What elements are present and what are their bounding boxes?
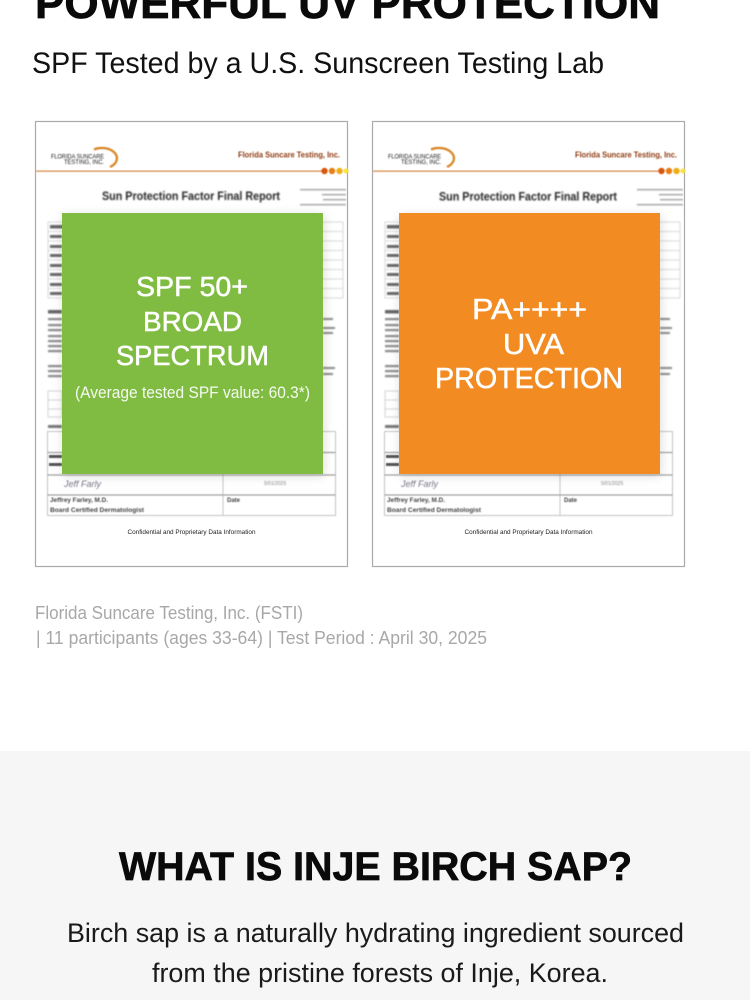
report blurred tables and body [385,222,680,428]
report title: Sun Protection Factor Final Report [439,190,617,204]
report logo: FLORIDA SUNCARE [51,154,105,160]
section body text: from the pristine forests of Inje, Korea. [152,958,608,988]
callout: PA++++ UVA protection [399,213,660,474]
panel: SPF report document [36,122,348,566]
panel: PA report document [372,122,686,566]
report address [637,189,683,205]
report signature table [384,432,672,516]
callout: PA++++ UVA protection: PA++++ [472,294,587,326]
panel: birch sap section [0,751,750,1000]
report signature table: 5/01/2025 [601,481,623,487]
callout: PA++++ UVA protection: PROTECTION [435,363,623,395]
report signature table: Date [227,498,241,504]
subtitle: SPF Tested by a U.S. Sunscreen Testing Lab [32,47,604,80]
report blurred tables and body [48,222,343,428]
report signature table: Jeff Farly [400,479,439,489]
report company name: Florida Suncare Testing, Inc. [575,150,677,160]
report logo [51,148,117,167]
callout: SPF 50+ broad spectrum: BROAD [143,306,242,337]
report signature table: Jeff Farly [63,479,102,489]
caption: test details [35,603,487,648]
report footer: Confidential and Proprietary Data Information [128,530,256,536]
report signature table: 5/01/2025 [264,481,286,487]
report title: Sun Protection Factor Final Report [102,189,280,203]
callout: SPF 50+ broad spectrum [62,213,323,474]
report signature table: Date [564,498,578,504]
report signature table [48,432,336,516]
report logo: TESTING, INC. [401,159,441,166]
callout: PA++++ UVA protection: UVA [503,329,565,361]
report logo: FLORIDA SUNCARE [388,154,442,160]
callout: SPF 50+ broad spectrum: SPF 50+ [136,271,248,302]
report signature table: Board Certified Dermatologist [50,508,144,514]
report signature table: Jeffrey Farley, M.D. [387,498,445,504]
report footer: Confidential and Proprietary Data Information [464,530,592,536]
report signature table: Jeffrey Farley, M.D. [50,498,108,504]
section heading: WHAT IS INJE BIRCH SAP? [119,845,632,889]
callout: SPF 50+ broad spectrum: (Average tested SPF value: 60.3*) [75,384,310,402]
report company name: Florida Suncare Testing, Inc. [238,150,340,160]
callout: SPF 50+ broad spectrum: SPECTRUM [116,340,269,371]
section body text: Birch sap is a naturally hydrating ingredient sourced [67,918,684,948]
section body text [67,918,684,988]
report signature table: Board Certified Dermatologist [387,508,481,514]
report logo: TESTING, INC. [64,159,104,166]
caption: test details: Florida Suncare Testing, Inc. (FSTI) [35,603,303,623]
report logo [388,148,454,167]
report header rule and dots [36,168,348,174]
caption: test details: | 11 participants (ages 33-64) | Test Period : April 30, 2025 [36,628,487,648]
report address [300,189,346,205]
report header rule and dots [373,168,686,174]
